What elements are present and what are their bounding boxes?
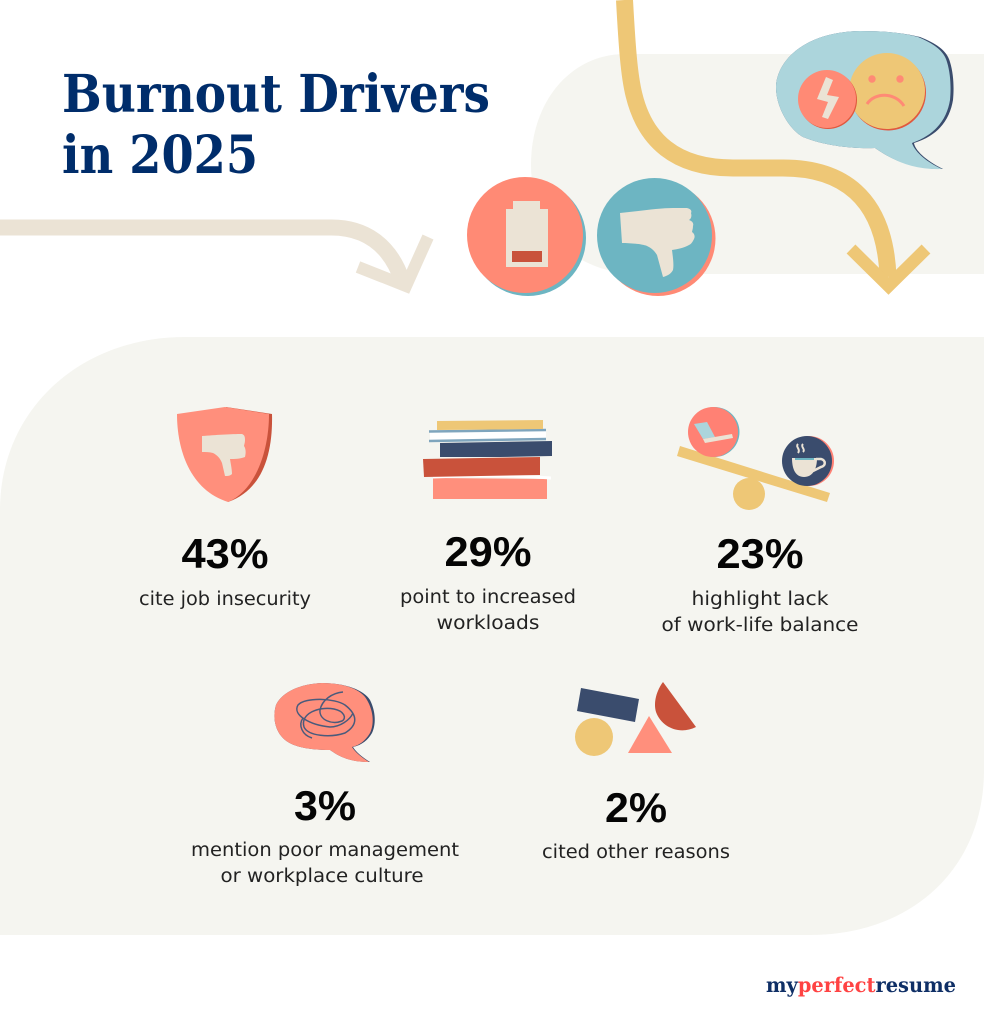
driver: workloads: workloads (436, 613, 540, 634)
driver: other reasons (542, 682, 730, 863)
driver: work-life balance (662, 407, 858, 636)
icon: shapes (575, 682, 696, 756)
icon: scribble bubble (274, 683, 375, 762)
title: in 2025 (62, 125, 258, 186)
icon: thumbs down circle (597, 178, 716, 296)
icon: book stack (423, 420, 552, 499)
arrow: beige (0, 227, 428, 286)
driver: work-life balance: of work-life balance (662, 615, 858, 636)
driver: poor management: or workplace culture (220, 866, 424, 887)
title (62, 64, 490, 186)
driver: job insecurity (139, 407, 311, 610)
driver: poor management (191, 683, 459, 887)
label: cited other reasons: cited other reasons (542, 842, 730, 863)
icon: shield (177, 407, 272, 502)
label: highlight lack of work-life balance: highlight lack (692, 589, 829, 610)
arrow: yellow (624, 0, 926, 286)
stat: 2%: 2% (605, 784, 667, 831)
panel: main background shape (0, 337, 984, 935)
logo: myperfectresume: myperfectresume (766, 973, 956, 997)
icon: battery circle (467, 177, 586, 296)
stat: 23%: 23% (716, 530, 804, 577)
panel: top background shape (531, 54, 984, 274)
icon: speech bubble with sad face (776, 31, 954, 169)
label: cite job insecurity: cite job insecurity (139, 589, 311, 610)
label: mention poor management or workplace culture: mention poor management (191, 840, 459, 861)
icon: seesaw (677, 407, 834, 510)
driver: workloads (400, 420, 576, 634)
stat: 29%: 29% (444, 528, 532, 575)
stat: 43%: 43% (182, 530, 268, 577)
title: Burnout Drivers (62, 64, 490, 125)
label: point to increased workloads: point to increased (400, 587, 576, 608)
stat: 3%: 3% (294, 782, 356, 829)
